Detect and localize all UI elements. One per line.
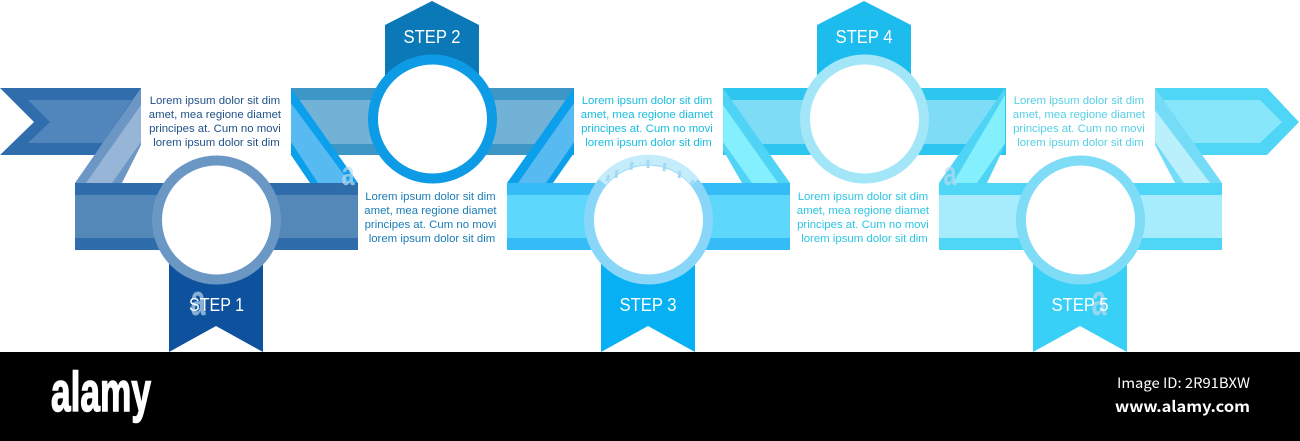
footer bar xyxy=(0,352,1300,441)
text block: step 3: lorem ipsum dolor sit dim xyxy=(585,137,712,149)
text block: step 4: amet, mea regione diamet xyxy=(797,205,930,217)
end arrow ribbon xyxy=(1155,88,1299,155)
step 3 tail tag: STEP 3 xyxy=(620,295,676,315)
text block: step 3: Lorem ipsum dolor sit dim xyxy=(582,95,712,107)
text block: step 1: Lorem ipsum dolor sit dim xyxy=(150,95,280,107)
fold: step 2 to step 3 xyxy=(507,88,574,183)
text block: step 5: amet, mea regione diamet xyxy=(1013,109,1146,121)
step 4 ring xyxy=(805,60,924,178)
step 4 head tag: STEP 4 xyxy=(836,27,892,47)
text block: step 2: lorem ipsum dolor sit dim xyxy=(369,233,495,245)
watermark fragments on folds xyxy=(342,155,957,193)
website: www.alamy.com xyxy=(1115,396,1250,417)
text block: step 2: Lorem ipsum dolor sit dim xyxy=(365,191,496,203)
watermark fragments on folds: a xyxy=(944,155,957,193)
text block: step 4: Lorem ipsum dolor sit dim xyxy=(798,191,928,203)
step 2 ring xyxy=(373,60,492,178)
step 4 head tag xyxy=(817,1,911,80)
start chevron ribbon xyxy=(0,88,141,155)
text block: step 2: amet, mea regione diamet xyxy=(364,205,497,217)
step 1 tail tag: a xyxy=(190,276,206,325)
step 3 ring xyxy=(589,160,708,280)
step 3 tail tag xyxy=(601,260,695,352)
text block: step 2: principes at. Cum no movi xyxy=(365,219,496,231)
step 5 tail tag xyxy=(1033,260,1127,352)
text block: step 1: amet, mea regione diamet xyxy=(149,109,282,121)
fold: step 1 to chevron xyxy=(75,88,141,183)
text block: step 1: principes at. Cum no movi xyxy=(149,123,281,135)
fold: step 4 to step 5 xyxy=(939,88,1005,183)
image id: Image ID: 2R91BXW xyxy=(1117,373,1250,393)
text block: step 1: lorem ipsum dolor sit dim xyxy=(153,137,280,149)
step 1 ring xyxy=(157,160,276,280)
fold: step 5 to arrow xyxy=(1155,88,1222,183)
step 1 tail tag: STEP 1 xyxy=(189,295,244,315)
text block: step 3: amet, mea regione diamet xyxy=(581,109,714,121)
text block: step 5: Lorem ipsum dolor sit dim xyxy=(1014,95,1144,107)
text block: step 3: principes at. Cum no movi xyxy=(581,123,713,135)
logo: alamy: alamy xyxy=(51,360,151,423)
fold: step 1 to step 2 xyxy=(291,88,358,183)
text block: step 4: lorem ipsum dolor sit dim xyxy=(801,233,928,245)
step 5 tail tag: a xyxy=(1092,276,1107,325)
step 5 ring xyxy=(1021,160,1140,280)
step 3 ribbon band xyxy=(507,183,790,250)
step 2 ribbon band xyxy=(291,88,574,155)
step 5 ribbon band xyxy=(939,183,1222,250)
text block: step 5: principes at. Cum no movi xyxy=(1013,123,1145,135)
watermark fragments on folds: a xyxy=(342,155,355,193)
text block: step 5: lorem ipsum dolor sit dim xyxy=(1017,137,1144,149)
fold: step 3 to step 4 xyxy=(723,88,790,183)
step 1 ribbon band xyxy=(75,183,358,250)
step 2 head tag xyxy=(385,1,479,80)
step 4 ribbon band xyxy=(723,88,1006,155)
text block: step 4: principes at. Cum no movi xyxy=(797,219,929,231)
step 1 tail tag xyxy=(169,260,263,352)
step 5 tail tag: STEP 5 xyxy=(1052,295,1108,315)
step 2 head tag: STEP 2 xyxy=(404,27,460,47)
